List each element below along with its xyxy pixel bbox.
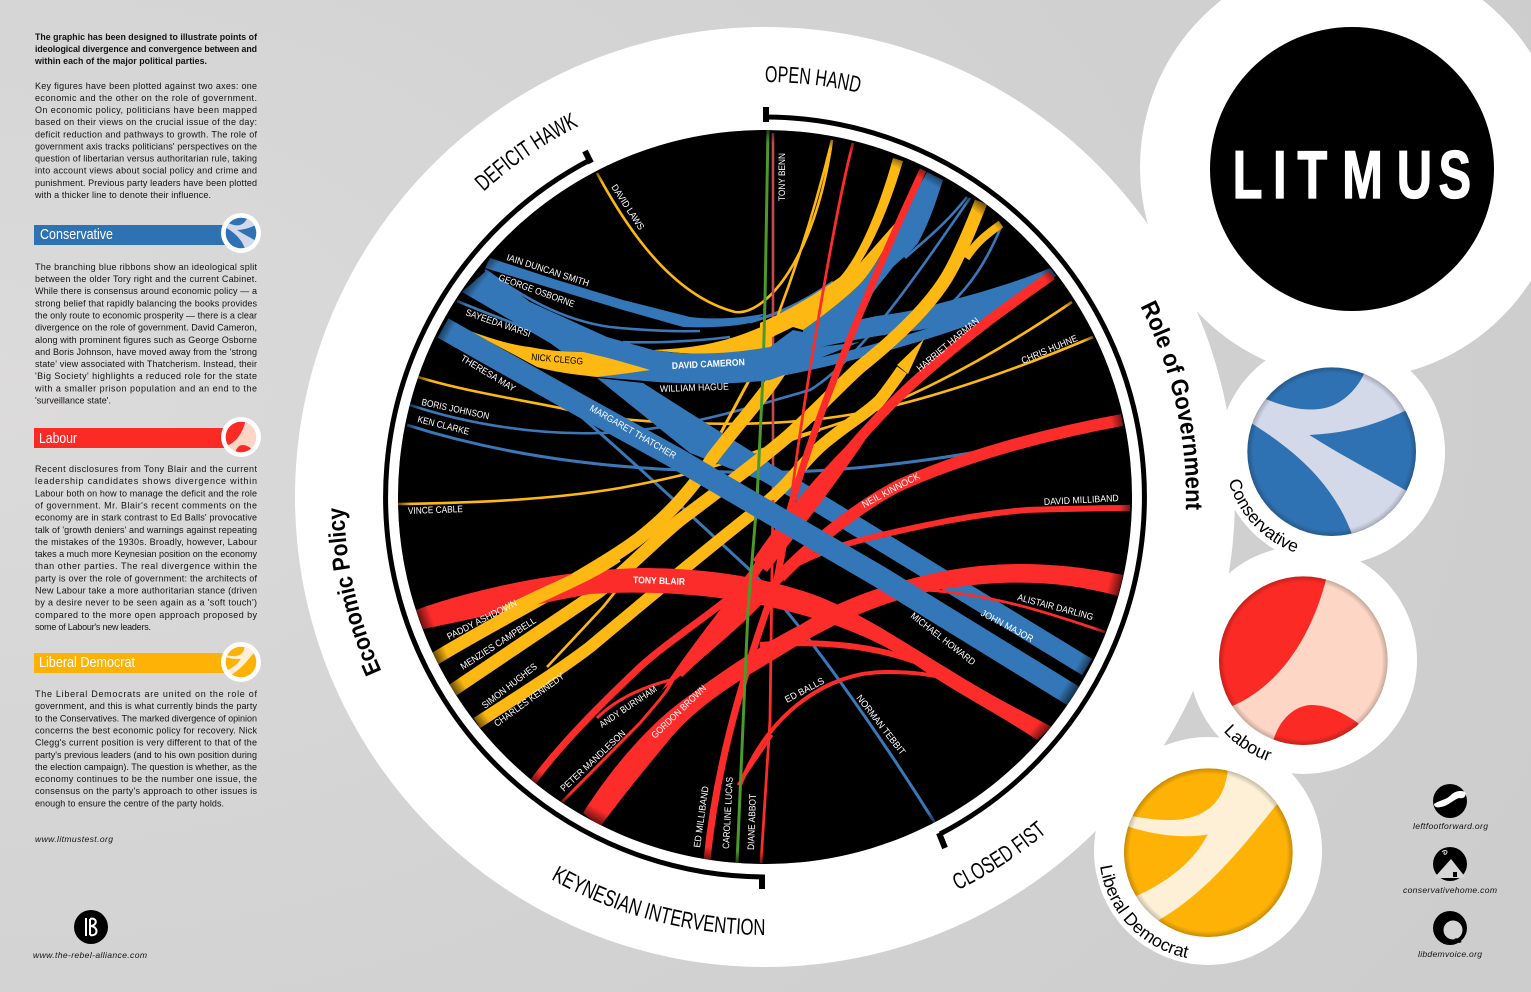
text block: Labour: than other parties. The real divergence within the [35,561,257,571]
politician labels: PADDY ASHDOWN [445,598,519,643]
Nick Clegg wedge [467,330,650,377]
politician labels: CHRIS HUHNE [1020,333,1079,367]
party badge: Conservative: Conservative [1230,480,1298,552]
politician labels: IAIN DUNCAN SMITH [505,252,590,289]
politician labels: ED MILLIBAND [692,785,712,848]
logo: rebel alliance: www.the-rebel-alliance.com [33,950,147,960]
Chris Huhne side blue band [803,268,1056,349]
text block: Liberal Democrat: government, and this is what currently binds the party [35,701,258,711]
politician labels: BORIS JOHNSON [420,397,490,422]
lower branch band [770,308,1000,373]
upper blue ribbons [597,172,1087,667]
text block: Conservative: While there is consensus around economic policy — a [35,286,257,296]
Tony Blair ribbon [416,568,1052,740]
politician labels: TONY BENN [777,153,788,201]
text block: Labour: New Labour take a more authoritarian stance (driven [35,586,257,596]
politician labels: GEORGE OSBORNE [497,272,576,310]
Kennedy ribbon tip [897,339,924,374]
axis labels: Economic Policy [328,508,381,676]
yellow ribbons [433,158,1001,723]
text block: Conservative [34,262,258,406]
Nick Clegg right wedge [654,327,772,354]
text block: Labour: Recent disclosures from Tony Blair and the current [35,464,257,474]
text block: Conservative: and Boris Johnson, have moved away from the 'strong [35,347,257,357]
logo: rebel alliance [33,910,147,960]
party badge: Labour: Labour [1224,724,1272,760]
axis labels [328,66,1202,935]
text block: Labour: takes a much more Keynesian position on the economy [35,549,258,559]
intro text: The graphic has been designed to illustrate points of [35,32,257,42]
axis labels: Role of Government [1140,300,1202,510]
text block: Conservative: 'Big Society' highlights a reduced role for the state [35,371,257,381]
text block: Liberal Democrat: party's previous leaders (and to his own position during [35,750,257,760]
thin ideological lines [398,133,1093,823]
politician labels: MARGARET THATCHER [588,403,678,462]
text block: Labour: leadership candidates shows divergence within [35,476,257,486]
Gordon Brown ribbon [583,564,1123,827]
David Cameron ribbon [462,270,803,384]
party badge: Conservative [1230,367,1416,552]
text block: Liberal Democrat: consensus on the party's approach to other issues is [35,786,258,796]
intro text: punishment. Previous party leaders have been plotted [35,178,257,188]
politician labels [408,153,1119,850]
politician labels: NORMAN TEBBIT [854,693,907,758]
text block: Conservative: The branching blue ribbons show an ideological split [35,262,257,272]
Cameron to Major wedge [597,378,770,480]
text block: Liberal Democrat: The Liberal Democrats are united on the role of [35,689,257,699]
politician labels: HARRIET HARMAN [915,316,982,374]
text block: Liberal Democrat [35,689,258,808]
other red lines [533,143,1130,863]
Paddy Ashdown ribbon [432,374,786,664]
politician labels: WILLIAM HAGUE [660,382,729,395]
header bar: Liberal Democrat: Liberal Democrat [39,655,135,671]
politician labels: GORDON BROWN [649,683,709,741]
text block: Liberal Democrat: to the Conservatives. The marked divergence of opinion [35,714,257,724]
intro text: ideological divergence and convergence between and [35,44,257,54]
text block: Labour: by a desire never to be seen again as a 'soft touch') [35,598,257,608]
politician labels: ED BALLS [783,676,826,706]
intro text: Key figures have been plotted against two axes: one [35,81,257,91]
axis labels: OPEN HAND [766,66,860,92]
top right fork [966,224,1001,258]
intro text: within each of the major political parties. [34,56,207,66]
politician labels: THERESA MAY [458,353,518,395]
intro text: based on their views on the crucial issue of the day: [35,117,257,127]
text block: Conservative: with a smaller prison population and an end to the [34,384,257,394]
text block: Liberal Democrat: the election campaign). The question is whether, as the [35,762,257,772]
header bar: Labour [34,417,261,457]
politician labels: ALISTAIR DARLING [1016,592,1094,623]
politician labels: DIANE ABBOT [746,794,759,850]
text block: Conservative: 'surveillance state'. [35,396,111,406]
header bar: Conservative: Conservative [40,227,113,243]
text block: Labour: talk of 'growth deniers' and warnings against repeating [35,525,257,535]
Menzies Campbell ribbon [453,202,981,690]
logo: left foot forward: leftfootforward.org [1413,821,1488,831]
politician labels: SIMON HUGHES [480,661,540,711]
text block: Labour: Labour both on how to manage the deficit and the role [35,488,257,498]
lower blue ribbons [443,258,1075,697]
Harriet Harman ribbon thickening [754,437,868,572]
text block: Conservative: the only route to economic prosperity — there is a clear [35,310,257,320]
text block: Conservative: between the older Tory right and the current Cabinet. [35,274,257,284]
footer link: litmustest: www.litmustest.org [35,834,113,844]
white backing discs [295,0,1531,967]
header bar: Labour: Labour [39,431,77,447]
party badge: Liberal Democrat: Liberal Democrat [1100,865,1189,958]
branch to top [803,172,943,340]
politician labels: NEIL KINNOCK [860,471,922,511]
axis labels: CLOSED FIST [953,820,1044,888]
text block: Labour: economy are in stark contrast to Ed Balls' provocative [35,512,257,522]
party badge: Liberal Democrat [1100,768,1293,958]
axis labels: KEYNESIAN INTERVENTION [552,866,764,935]
axis labels: DEFICIT HAWK [474,112,578,191]
politician labels: NICK CLEGG [531,352,583,368]
intro text: with a thicker line to denote their influence. [34,190,211,200]
politician labels: VINCE CABLE [408,504,463,517]
intro text: On economic policy, politicians have been mapped [35,105,257,115]
politician labels: KEN CLARKE [416,414,470,438]
politician labels: CAROLINE LUCAS [721,777,736,849]
text block: Liberal Democrat: concerns the best economic policy for recovery. Nick [35,726,258,736]
text block: Labour: party is over the role of government: the architects of [35,574,257,584]
politician labels: DAVID CAMERON [672,357,745,372]
band junction [803,342,860,362]
politician labels: CHARLES KENNEDY [492,671,567,729]
text block: Conservative: state' view associated with Thatcherism. Instead, their [35,359,257,369]
text block: Liberal Democrat: Clegg's current position is very different to that of the [35,738,257,748]
text block: Labour: the mistakes of the 1930s. Broadly, however, Labour [35,537,257,547]
logo: LITMUS [1210,27,1494,311]
header bar: Liberal Democrat [34,642,261,682]
text block: Labour: compared to the more open approach proposed by [35,610,258,620]
intro text: government axis tracks politicians' perspectives on the [35,142,257,152]
intro text: economic and the other on the role of government. [35,93,257,103]
Charles Kennedy ribbon [477,370,902,723]
logo: conservative home: conservativehome.com [1403,885,1497,895]
header bar: Conservative [34,213,261,253]
Nick Clegg upper sweep [760,158,903,343]
red ribbons [416,143,1130,863]
logo: left foot forward [1413,784,1488,831]
politician labels: MICHAEL HOWARD [908,611,977,668]
logo: LITMUS: LITMUS [1233,136,1471,213]
text block: Labour: some of Labour's new leaders. [35,622,151,632]
green line: Caroline Lucas [737,130,768,863]
politician labels: DAVID MILLIBAND [1044,493,1119,508]
Iain Duncan Smith ribbon [485,258,767,327]
intro text [34,32,257,200]
logo: conservative home [1403,847,1497,895]
axis brackets [386,107,1144,889]
politician labels: JOHN MAJOR [979,608,1035,645]
central red mass [662,600,754,690]
text block: Conservative: divergence on the role of government. David Cameron, [35,322,257,332]
intro text: question of libertarian versus authoritarian rule, taking [35,154,257,164]
intro text: into account views about social policy and crime and [35,166,257,176]
Paddy Ashdown crossing over Tony Blair [505,556,617,613]
logo: lib dem voice [1418,911,1482,959]
text block: Conservative: strong belief that rapidly balancing the books provides [35,298,258,308]
intro text: deficit reduction and pathways to growth. The role of [35,130,257,140]
politician labels: TONY BLAIR [633,575,685,588]
party badge: Labour [1218,576,1388,760]
politician labels: PETER MANDLESON [559,728,628,794]
text block: Labour [35,464,258,632]
text block: Liberal Democrat: enough to ensure the centre of the party holds. [35,798,224,808]
text block: Labour: of government. Mr. Blair's recent comments on the [35,500,257,510]
politician labels: ANDY BURNHAM [598,684,659,730]
politician labels: DAVID LAWS [608,183,646,232]
text block: Conservative: along with prominent figures such as George Osborne [35,335,257,345]
chord diagram [398,130,1132,864]
text block: Liberal Democrat: economy continues to be the number one issue, the [35,774,257,784]
Margaret Thatcher ribbon [443,328,1075,697]
politician labels: SAYEEDA WARSI [464,307,532,340]
John Major ribbon [760,464,1092,675]
logo: lib dem voice: libdemvoice.org [1418,949,1482,959]
politician labels: MENZIES CAMPBELL [459,615,538,673]
